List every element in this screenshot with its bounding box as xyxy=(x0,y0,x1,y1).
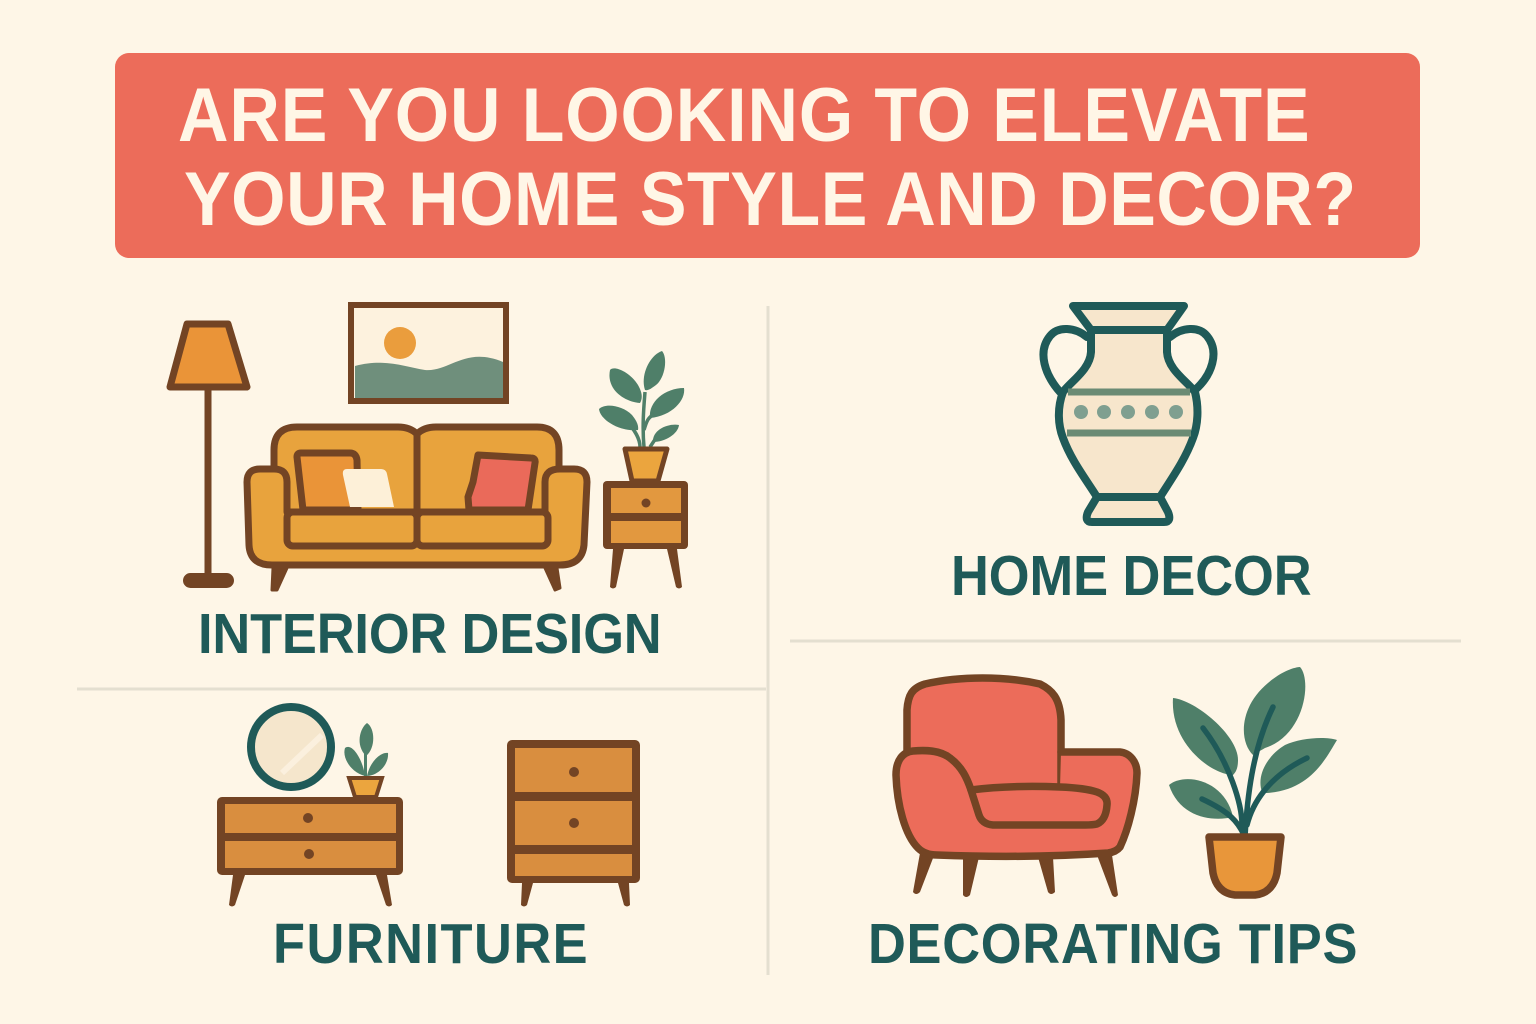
panel: interior design xyxy=(170,305,688,665)
icon: tall dresser xyxy=(507,740,640,906)
icon: side table with plant xyxy=(599,351,688,588)
panel: home decor xyxy=(951,306,1312,607)
label: decorating tips: DECORATING TIPS xyxy=(868,911,1357,975)
icon: small plant xyxy=(344,723,388,797)
icon: floor lamp xyxy=(170,324,247,586)
title banner: ARE YOU LOOKING TO ELEVATE xyxy=(178,73,1310,158)
icon: mirror xyxy=(251,707,331,787)
icon: sofa xyxy=(247,427,587,590)
label: home decor: HOME DECOR xyxy=(951,543,1312,607)
icon: wall picture xyxy=(351,305,506,401)
icon: potted plant xyxy=(1169,667,1337,895)
panel: decorating tips xyxy=(868,667,1357,975)
icon: low dresser xyxy=(217,797,403,906)
icon: armchair xyxy=(896,678,1137,897)
title banner xyxy=(115,53,1420,258)
icon: vase xyxy=(1043,306,1213,522)
panel: furniture xyxy=(217,707,640,975)
label: furniture: FURNITURE xyxy=(273,911,588,975)
label: interior design: INTERIOR DESIGN xyxy=(198,601,662,665)
title banner: YOUR HOME STYLE AND DECOR? xyxy=(184,157,1356,242)
